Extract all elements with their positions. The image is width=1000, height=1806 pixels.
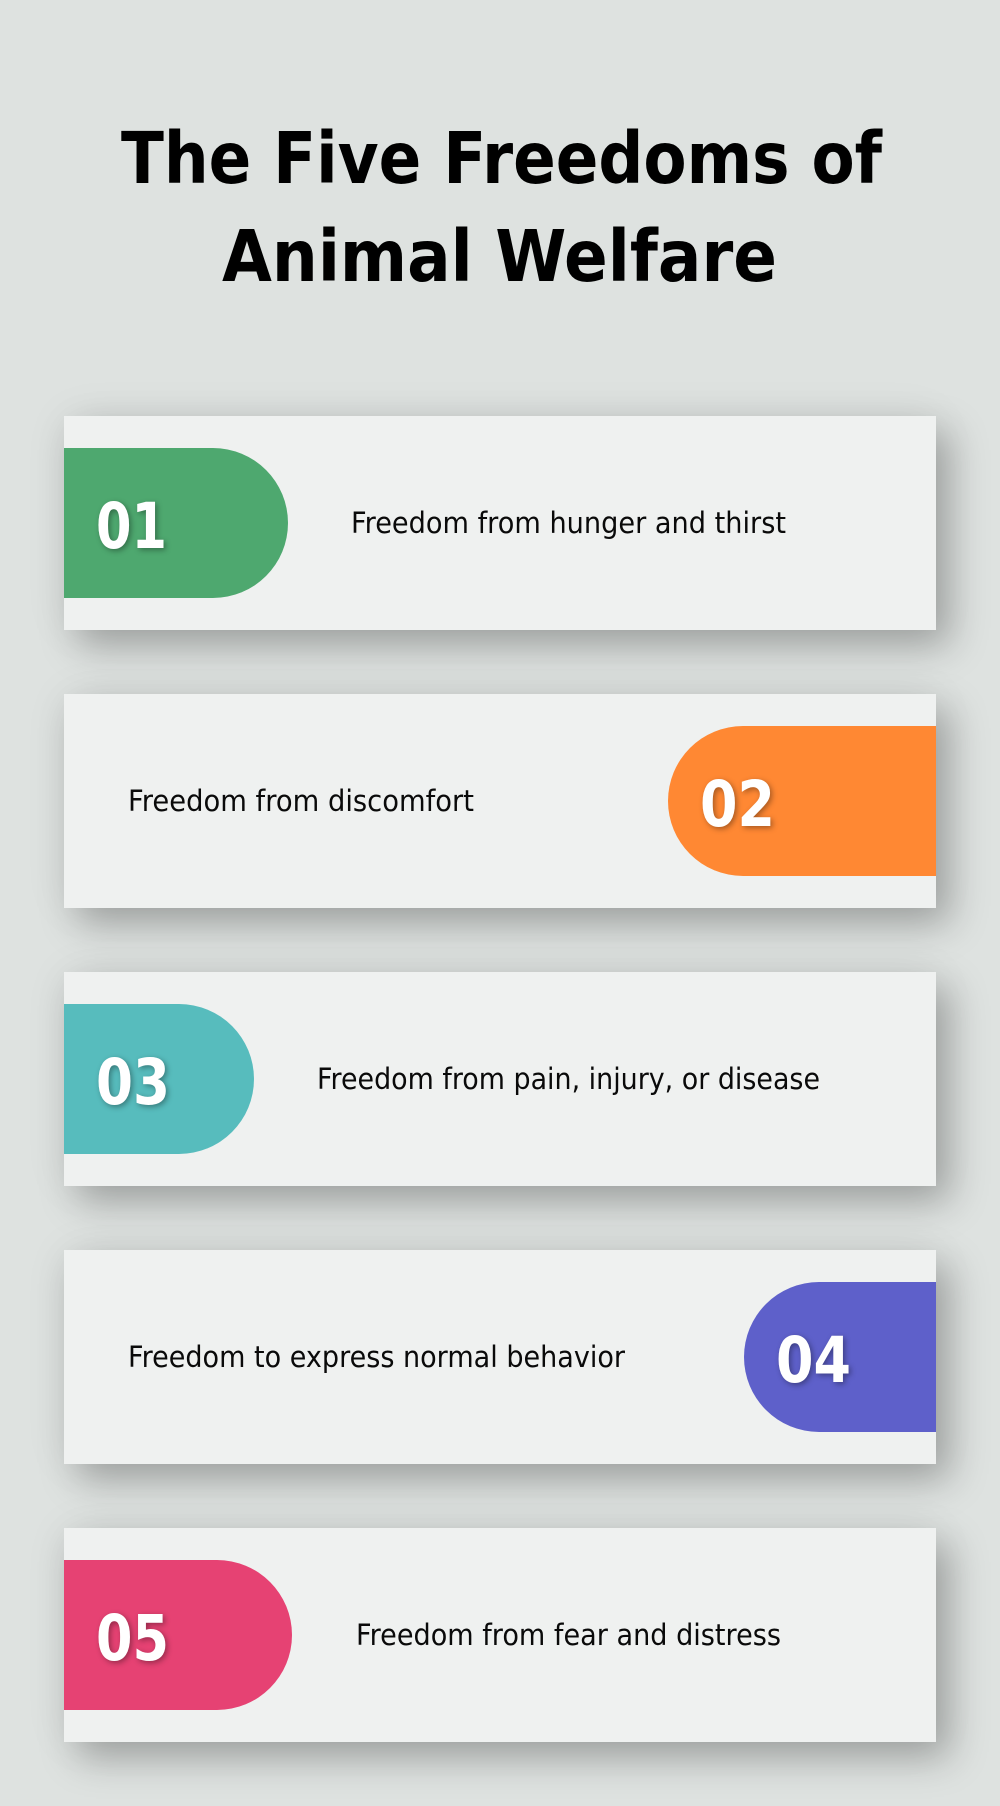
number badge 04 <box>744 1282 936 1432</box>
number and label text 01: 01 <box>96 490 167 563</box>
number and label text 04 <box>128 1324 854 1397</box>
number and label text 03: 03 <box>96 1046 170 1119</box>
number and label text 05: 05 <box>96 1602 169 1675</box>
number badge 05 <box>64 1560 292 1710</box>
number badge 01 <box>64 448 288 598</box>
title: The Five Freedoms of <box>121 117 883 200</box>
number badge 02 <box>668 726 936 876</box>
number and label text 05: Freedom from fear and distress <box>356 1618 781 1652</box>
number and label text 01: Freedom from hunger and thirst <box>351 506 786 540</box>
panel: freedom 01 <box>64 416 936 630</box>
number badge 03 <box>64 1004 254 1154</box>
title: Animal Welfare <box>222 215 777 298</box>
number and label text 02 <box>128 768 776 841</box>
number and label text 04: Freedom to express normal behavior <box>128 1340 626 1374</box>
number and label text 04: 04 <box>776 1324 851 1397</box>
number and label text 01 <box>96 490 786 563</box>
panel: freedom 02 <box>64 694 936 908</box>
panel: freedom 04 <box>64 1250 936 1464</box>
number and label text 02: 02 <box>700 768 775 841</box>
number and label text 03: Freedom from pain, injury, or disease <box>317 1062 820 1096</box>
number and label text 05 <box>96 1602 781 1675</box>
number and label text 03 <box>96 1046 820 1119</box>
number and label text 02: Freedom from discomfort <box>128 784 474 818</box>
panel: freedom 05 <box>64 1528 936 1742</box>
title <box>121 117 883 298</box>
panel: freedom 03 <box>64 972 936 1186</box>
